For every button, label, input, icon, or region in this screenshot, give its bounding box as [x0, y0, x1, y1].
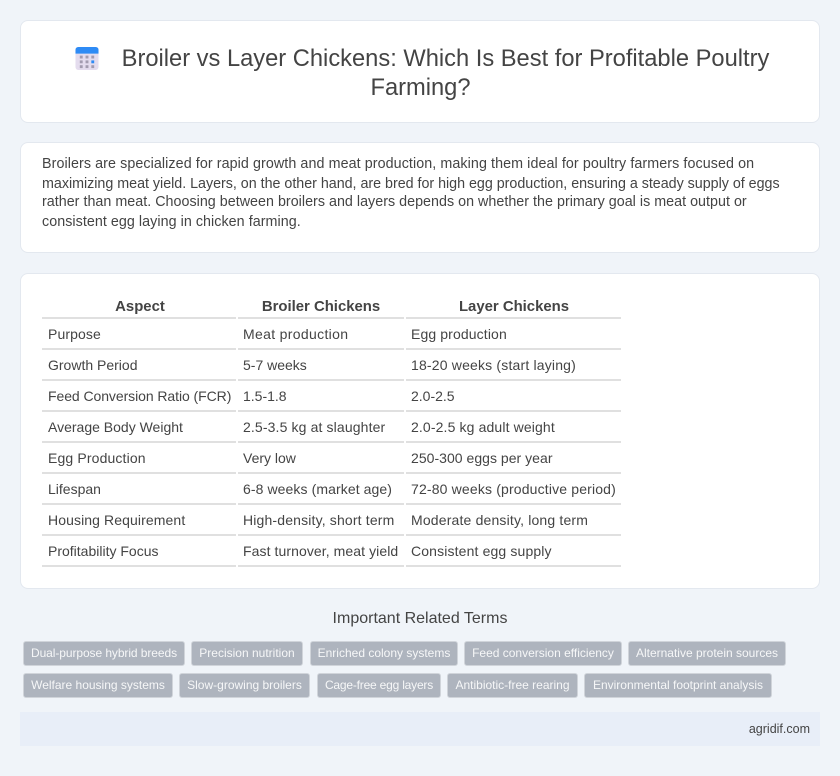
description text: Broilers are specialized for rapid growth and meat production, making them ideal for poultry farmers focused on: [42, 156, 754, 172]
tag: Dual-purpose hybrid breeds: [31, 646, 177, 660]
tag: Enriched colony systems: [318, 646, 450, 660]
row: average body weight: 2.5-3.5 kg at slaughter: [243, 419, 385, 435]
row: egg production: Very low: [243, 450, 296, 466]
tag: [310, 641, 458, 666]
tag: [317, 673, 441, 698]
tag: Cage-free egg layers: [325, 678, 433, 692]
row: purpose: Meat production: [243, 326, 348, 342]
description text: [42, 156, 780, 230]
row: feed conversion ratio: [48, 388, 455, 404]
footer source: agridif.com: [749, 722, 810, 736]
tag: Precision nutrition: [199, 646, 295, 660]
row: profitability focus: Fast turnover, meat yield: [243, 543, 398, 559]
row: profitability focus: [48, 543, 552, 559]
row: egg production: [48, 450, 553, 466]
tag: Slow-growing broilers: [187, 678, 302, 692]
table header: Broiler Chickens: [262, 299, 380, 315]
title: Farming?: [370, 75, 471, 101]
tag: [584, 673, 772, 698]
icon: calendar: [75, 47, 99, 70]
table header: Aspect: [115, 299, 165, 315]
row: growth period: Growth Period: [48, 357, 137, 373]
heading: important related terms: Important Related Terms: [333, 610, 507, 627]
tag: [628, 641, 786, 666]
tag: Environmental footprint analysis: [593, 678, 763, 692]
table header: [115, 299, 569, 315]
row: egg production: 250-300 eggs per year: [411, 450, 553, 466]
row: growth period: 5-7 weeks: [243, 357, 307, 373]
row: purpose: Egg production: [411, 326, 507, 342]
row: growth period: 18-20 weeks (start laying): [411, 357, 576, 373]
row: lifespan: Lifespan: [48, 481, 101, 497]
panel: description: [20, 142, 820, 253]
tag: [179, 673, 310, 698]
tag: Antibiotic-free rearing: [455, 678, 570, 692]
description text: consistent egg laying in chicken farming.: [42, 214, 301, 230]
row: feed conversion ratio: 1.5-1.8: [243, 388, 287, 404]
title: [122, 46, 770, 101]
row: lifespan: [48, 481, 616, 497]
tag: [191, 641, 303, 666]
row: housing requirement: Moderate density, long term: [411, 512, 588, 528]
row: profitability focus: Consistent egg supply: [411, 543, 552, 559]
description text: maximizing meat yield. Layers, on the other hand, are bred for high egg production, ensuring a steady supply of eggs: [42, 176, 780, 192]
panel: title header: [20, 20, 820, 123]
row: egg production: Egg Production: [48, 450, 146, 466]
row: housing requirement: [48, 512, 588, 528]
row: purpose: Purpose: [48, 326, 101, 342]
row: average body weight: [48, 419, 555, 435]
row: average body weight: Average Body Weight: [48, 419, 183, 435]
description text: rather than meat. Choosing between broilers and layers depends on whether the primary goal is meat output or: [42, 194, 747, 210]
row: average body weight: 2.0-2.5 kg adult weight: [411, 419, 555, 435]
row: purpose: [48, 326, 507, 342]
row: lifespan: 72-80 weeks (productive period): [411, 481, 616, 497]
comparison table: [42, 299, 621, 567]
tag: Feed conversion efficiency: [472, 646, 614, 660]
title: Broiler vs Layer Chickens: Which Is Best for Profitable Poultry: [122, 46, 769, 72]
row: feed conversion ratio: Feed Conversion Ratio (FCR): [48, 388, 231, 404]
tag: [447, 673, 578, 698]
row: profitability focus: Profitability Focus: [48, 543, 158, 559]
footer bar: [20, 712, 820, 746]
row: growth period: [48, 357, 576, 373]
row: housing requirement: High-density, short term: [243, 512, 394, 528]
row: feed conversion ratio: 2.0-2.5: [411, 388, 455, 404]
tag: [464, 641, 622, 666]
panel: comparison table: [20, 273, 820, 589]
table header: Layer Chickens: [459, 299, 569, 315]
related term tags: [23, 641, 786, 698]
tag: [23, 673, 173, 698]
tag: Welfare housing systems: [31, 678, 165, 692]
row: lifespan: 6-8 weeks (market age): [243, 481, 392, 497]
tag: Alternative protein sources: [636, 646, 778, 660]
tag: [23, 641, 185, 666]
row: housing requirement: Housing Requirement: [48, 512, 185, 528]
